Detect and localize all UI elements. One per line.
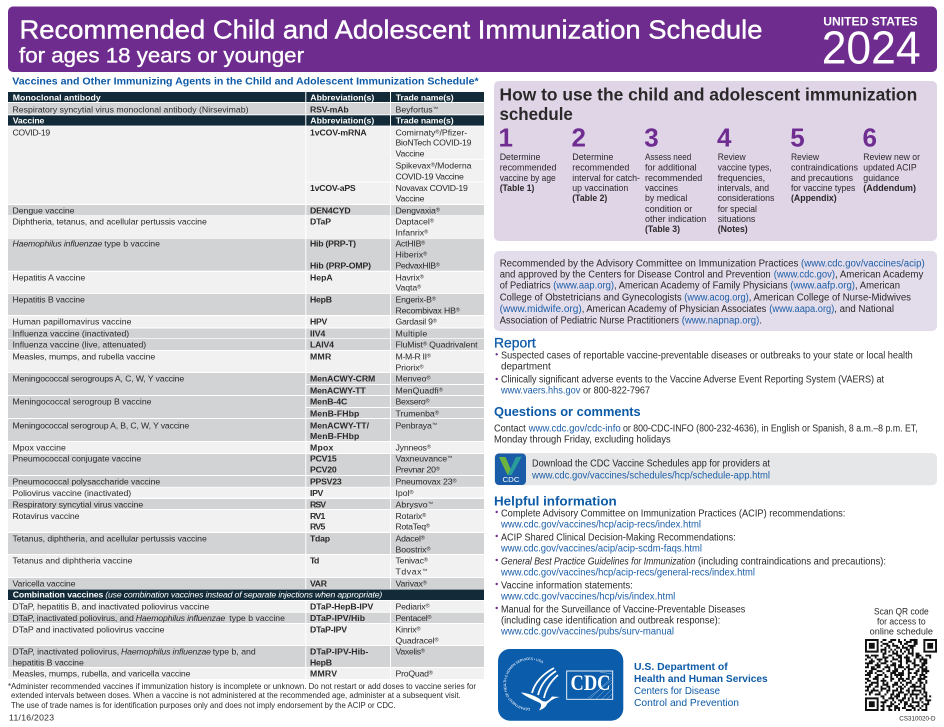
panel: recommending organizations: (www.aapa.org) [769,304,834,315]
row: varicella: Varivax® [396,579,427,589]
row: RSV: Respiratory syncytial virus vaccine [12,500,143,510]
step 5: 5 [790,123,805,153]
row: influenza inactivated [12,328,427,338]
row: DTaP-IPV-Hib-HepB: Vaxelis® [396,647,425,657]
row: Hib: Hiberix® [396,249,427,259]
step 3: 3 [644,123,659,153]
row: RSV monoclonal antibody [12,105,438,115]
row: meningococcal ACWY [12,374,443,396]
row: rotavirus: RV1 [310,511,325,521]
row: DTaP: DTaP [310,217,331,227]
section: questions or comments: Contact [494,424,526,435]
row: Hib: Haemophilus influenzae [12,239,102,249]
row: DTaP-IPV-Hib-HepB: hepatitis B vaccine [12,658,84,668]
row: DTaP-IPV-Hib-HepB [12,647,425,668]
row: hepatitis A: Hepatitis A vaccine [12,273,85,283]
step 6: 6 [862,123,877,153]
row: pneumococcal polysaccharide [12,477,456,487]
step 5: for vaccine types [791,183,856,193]
footnote [8,682,476,710]
row: pneumococcal conjugate: PCV15 [310,454,337,464]
row: HPV: Gardasil 9® [396,317,437,327]
row: meningococcal ACWY: MenQuadfi® [396,386,443,396]
step 1: Determine [500,152,540,162]
row: DTaP-IPV-Hib-HepB: HepB [310,658,332,668]
step 4: 4 [717,123,732,153]
row: MMR [12,352,431,372]
icon: CDC vaccine schedules app [495,454,526,485]
table heading: Vaccines and Other Immunizing Agents in the Child and Adolescent Immunization Schedule* [12,77,480,88]
row: DTaP-IPV/Hib: Pentacel® [396,613,432,623]
panel: recommending organizations: (www.midwife.org) [500,304,582,315]
row: DTaP-HepB-IPV: DTaP-HepB-IPV [310,602,374,612]
step 4: situations [718,214,756,224]
step 3: other indication [645,214,706,224]
row: Hib: ActHIB® [396,239,425,249]
section: helpful information: ACIP Shared Clinical Decision-Making Recommendations: [501,533,736,544]
panel: recommending organizations: . [759,316,762,327]
row: MMRV [12,669,433,679]
row: Hib: Hib (PRP-OMP) [310,260,371,270]
row: RSV: Abrysvo™ [396,500,433,510]
step 4: considerations [718,193,775,203]
step 5: Review [791,152,819,162]
row: MMR: MMR [310,352,332,362]
row: MMR: M-M-R II® [396,352,431,362]
step 4: frequencies, [718,173,765,183]
QR caption: online schedule [870,627,933,637]
step 5: and precautions [791,173,853,183]
row: DTaP-IPV: DTaP-IPV [310,625,347,635]
title: Recommended Child and Adolescent Immunization Schedule [20,15,762,45]
step 3: (Table 3) [645,224,680,234]
QR code [865,640,937,710]
how-to heading [500,85,917,124]
row: meningococcal B: Bexsero® [396,397,430,407]
section: helpful information: www.cdc.gov/vaccines/hcp/acip-recs/index.html [500,520,701,531]
row: meningococcal ABCWY: Meningococcal serogroup A, B, C, W, Y vaccine [12,421,189,431]
panel: how to use [494,81,937,241]
row: pneumococcal conjugate [12,454,452,475]
row: COVID-19: COVID-19 [12,128,50,138]
vaccine table [8,92,484,679]
step 5 [790,123,858,203]
row: dengue [12,206,440,216]
questions heading: Questions or comments [494,404,641,419]
row: pneumococcal polysaccharide: PPSV23 [310,477,342,487]
row: COVID-19: BioNTech COVID-19 [396,138,472,148]
step 4: (Notes) [718,224,748,234]
section: report: www.vaers.hhs.gov [500,386,580,397]
panel: recommending organizations: (www.aafp.org) [790,281,855,292]
header: vaccine [13,116,454,126]
header: combination vaccines: (use combination vaccines instead of separate injections when appropriate) [105,590,382,600]
row: RSV: RSV [310,500,326,510]
row: influenza live: FluMist® Quadrivalent [396,340,478,350]
row: Hib: PedvaxHIB® [396,260,440,270]
row: Hib [12,239,440,270]
row: meningococcal ACWY: MenACWY-TT [310,386,366,396]
panel: recommending organizations: , American College of Nurse-Midwives [749,293,911,304]
row: DTaP-IPV-Hib-HepB: type b, and [213,647,256,657]
QR caption [870,607,933,637]
year: 2024 [822,21,921,73]
panel: recommending organizations: (www.cdc.gov/vaccines/acip) [801,259,925,270]
HHS and CDC name: U.S. Department of [634,662,728,673]
row: influenza inactivated: Influenza vaccine (inactivated) [12,328,129,338]
row: Tdap: Tetanus, diphtheria, and acellular pertussis vaccine [12,534,207,544]
row: Tdap: Adacel® [396,534,425,544]
report heading: Report [494,335,536,350]
section: questions or comments: Monday through Friday, excluding holidays [494,435,671,446]
panel: recommending organizations: , American Academy [835,270,923,281]
HHS and CDC name [634,662,768,709]
row: influenza live [12,340,478,350]
HHS and CDC name: Control and Prevention [634,698,739,709]
row: COVID-19: Vaccine [396,149,425,159]
country label: UNITED STATES [823,14,918,28]
row: dengue: DEN4CYD [310,206,351,216]
section: helpful information [494,494,886,638]
row: RSV monoclonal antibody: RSV-mAb [310,105,349,115]
section: helpful information: www.cdc.gov/vaccines/pubs/surv-manual [500,627,674,638]
panel: recommending organizations: , American Academy of Physician Associates [582,304,766,315]
row: meningococcal ABCWY: Penbraya™ [396,421,437,431]
row: meningococcal ABCWY: MenB-FHbp [310,431,359,441]
step 1: recommended [500,163,556,173]
section: helpful information: www.cdc.gov/vaccines/hcp/vis/index.html [500,592,675,603]
panel: app download: Download the CDC Vaccine Schedules app for providers at [532,459,770,470]
row: DTaP-IPV/Hib: DTaP-IPV/Hib [310,613,365,623]
row: DTaP: Daptacel® [396,217,434,227]
step 2: interval for catch- [572,173,640,183]
row: poliovirus [12,488,414,498]
how-to heading: schedule [500,104,573,124]
row: HPV: Human papillomavirus vaccine [12,317,132,327]
HHS seal: DEPARTMENT OF HEALTH & HUMAN SERVICES • USA [504,658,543,710]
step 2: 2 [572,123,586,153]
row: poliovirus: Poliovirus vaccine (inactivated) [12,488,131,498]
panel: recommending organizations: , American Academy of Family Physicians [614,281,788,292]
row: influenza inactivated: IIV4 [310,328,325,338]
HHS and CDC name: Health and Human Services [634,674,768,685]
step 6: Review new or [863,152,920,162]
row: Tdap: Boostrix® [396,545,430,555]
step 2: recommended [572,163,629,173]
row backgrounds [8,92,484,679]
row: MMRV: ProQuad® [396,669,433,679]
section: report: or 800-822-7967 [583,386,650,397]
step 3: for additional [645,163,697,173]
section: helpful information: (including contraindications and precautions): [698,557,886,568]
row: DTaP-IPV: Kinrix® [396,625,420,635]
QR caption: Scan QR code [874,607,929,617]
row: meningococcal B [12,397,439,419]
row: DTaP-IPV/Hib: Haemophilus influenzae [136,613,226,623]
footnote: The use of trade names is for identification purposes only and does not imply endorsement by the ACIP or CDC. [11,701,396,710]
header: vaccine: Vaccine [13,116,45,126]
panel: app download: www.cdc.gov/vaccines/schedules/hcp/schedule-app.html [531,471,770,482]
step 6: updated ACIP [863,163,917,173]
step 4: intervals, and [718,183,769,193]
row: hepatitis B: Engerix-B® [396,295,436,305]
row: COVID-19: 1vCOV-aPS [310,183,356,193]
header: combination vaccines: Combination vaccines [13,590,104,600]
row: rotavirus: Rotarix® [396,511,426,521]
panel: recommending organizations: of Pediatrics [500,281,551,292]
row: Tdap [12,534,430,555]
subtitle: for ages 18 years or younger [19,45,304,68]
row: pneumococcal conjugate: PCV20 [310,465,337,475]
row: MMR: Priorix® [396,362,424,372]
CDC badge: CDC [570,670,610,695]
row: Td: Tetanus and diphtheria vaccine [12,556,133,566]
step 6 [862,123,920,193]
row: DTaP-IPV-Hib-HepB: DTaP-IPV-Hib- [310,647,368,657]
row: mpox [12,443,431,453]
row: Td [12,556,428,577]
step 1: (Table 1) [500,183,534,193]
row: influenza inactivated: Multiple [396,328,427,338]
header: vaccine: Abbreviation(s) [310,116,374,126]
row: dengue: Dengvaxia® [396,206,440,216]
row: DTaP-IPV-Hib-HepB: Haemophilus influenzae [121,647,211,657]
header: monoclonal antibody: Trade name(s) [396,92,454,102]
row: meningococcal ACWY: MenACWY-CRM [310,374,375,384]
row: rotavirus [12,511,430,532]
footnote: *Administer recommended vaccines if immunization history is incomplete or unknown. Do not restart or add doses to vaccine series for [8,682,476,691]
row: Td: Tdvax™ [396,567,428,577]
row: meningococcal ACWY: Menveo® [396,374,430,384]
row: mpox: Mpox [310,443,333,453]
panel: recommending organizations: (www.aap.org) [553,281,614,292]
row: poliovirus: Ipol® [396,488,414,498]
header: vaccine: Trade name(s) [396,116,454,126]
section: questions or comments: www.cdc.gov/cdc-info [528,424,621,435]
step 2: (Table 2) [572,193,607,203]
row: Td: Td [310,556,319,566]
section: report: department [501,362,551,373]
step 5: contraindications [791,163,858,173]
row: COVID-19 [12,128,472,204]
row: hepatitis B [12,295,460,315]
panel: recommending organizations [494,251,937,331]
step 2: up vaccination [572,183,628,193]
row: varicella: VAR [310,579,328,589]
step 1 [498,123,556,193]
step 5: (Appendix) [791,193,837,203]
step 3: vaccines [645,183,678,193]
step 2 [572,123,640,203]
row: pneumococcal polysaccharide: Pneumovax 23® [396,477,456,487]
row: hepatitis A: HepA [310,273,333,283]
row: MMRV: Measles, mumps, rubella, and varicella vaccine [12,669,191,679]
row: DTaP-HepB-IPV: Pediarix® [396,602,430,612]
panel: recommending organizations: (www.napnap.org) [682,316,759,327]
row: DTaP-IPV/Hib: DTaP, inactivated poliovirus, and [12,613,134,623]
step 3: Assess need [645,152,691,162]
row: DTaP-HepB-IPV: DTaP, hepatitis B, and inactivated poliovirus vaccine [12,602,209,612]
step 6: (Addendum) [863,183,916,193]
row: DTaP-IPV: DTaP and inactivated poliovirus vaccine [12,625,165,635]
panel: recommending organizations: and approved by the Centers for Disease Control and Prevention [500,270,771,281]
how-to heading: How to use the child and adolescent immunization [500,85,917,105]
section: helpful information: Manual for the Surveillance of Vaccine-Preventable Diseases [501,605,745,616]
row: mpox: Jynneos® [396,443,431,453]
section: helpful information: www.cdc.gov/vaccines/acip/acip-scdm-faqs.html [500,544,702,555]
row: DTaP [12,217,434,237]
section: helpful information: General Best Practice Guidelines for Immunization [501,557,696,568]
row: meningococcal B: Meningococcal serogroup B vaccine [12,397,152,407]
row: hepatitis A: Havrix® [396,273,424,283]
row: pneumococcal conjugate: Pneumococcal conjugate vaccine [12,454,141,464]
row: DTaP-IPV: Quadracel® [396,636,438,646]
panel: app download [494,453,937,485]
row: DTaP-IPV/Hib [12,613,432,623]
row: varicella [12,579,427,589]
row: pneumococcal conjugate: Vaxneuvance™ [396,454,452,464]
step 1: vaccine by age [500,173,556,183]
row: RSV monoclonal antibody: Beyfortus™ [396,105,438,115]
section: report: Clinically significant adverse events to the Vaccine Adverse Event Reporting System (VAERS) at [501,375,884,386]
helpful heading: Helpful information [494,494,617,509]
row: RSV [12,500,433,510]
row: MMRV: MMRV [310,669,337,679]
row: HPV: HPV [310,317,328,327]
step 3: condition or [645,204,692,214]
row: DTaP-HepB-IPV [12,602,430,612]
icon: CDC vaccine schedules app: CDC [502,477,520,484]
row: influenza live: Influenza vaccine (live, attenuated) [12,340,146,350]
row: HPV [12,317,437,327]
row: DTaP: Infanrix® [396,227,428,237]
section: questions or comments [494,404,918,446]
row: meningococcal ABCWY [12,421,437,441]
panel: recommending organizations: , and National [834,304,894,315]
section: helpful information: www.cdc.gov/vaccines/hcp/acip-recs/general-recs/index.html [500,568,755,579]
section: helpful information: (including case identification and outbreak response): [501,616,720,627]
step 4: Review [718,152,746,162]
row: varicella: Varicella vaccine [12,579,76,589]
panel: recommending organizations: Association of Pediatric Nurse Practitioners [500,316,679,327]
header: monoclonal antibody: Abbreviation(s) [310,92,374,102]
section: report: Suspected cases of reportable vaccine-preventable diseases or outbreaks to your state or local health [501,351,913,362]
row: DTaP-IPV/Hib: type b vaccine [229,613,285,623]
row: Td: Tenivac® [396,556,428,566]
header: monoclonal antibody: Monoclonal antibody [13,92,101,102]
panel: recommending organizations: (www.acog.org) [684,293,749,304]
step 2: Determine [572,152,613,162]
row: meningococcal ACWY: Meningococcal serogroups A, C, W, Y vaccine [12,374,184,384]
panel: recommending organizations: Recommended by the Advisory Committee on Immunization Practices [500,259,798,270]
header: monoclonal antibody [13,92,454,102]
row: influenza live: LAIV4 [310,340,334,350]
step 6: guidance [863,173,899,183]
row: MMR: Measles, mumps, and rubella vaccine [12,352,155,362]
footnote: extended intervals between doses. When a vaccine is not administered at the recommended age, administer at a subsequent visit. [11,691,461,700]
row: COVID-19: COVID-19 Vaccine [396,172,464,182]
logo: HHS and CDC [498,649,624,721]
row: hepatitis B: Recombivax HB® [396,305,460,315]
row: COVID-19: 1vCOV-mRNA [310,128,367,138]
row: DTaP-IPV [12,625,438,646]
row: COVID-19: Comirnaty®/Pfizer- [396,128,467,138]
step 4: vaccine types, [718,163,772,173]
date: 11/16/2023 [9,713,54,723]
row: hepatitis A [12,273,424,293]
row: rotavirus: RV5 [310,522,325,532]
step 4 [717,123,775,234]
row: pneumococcal conjugate: Prevnar 20® [396,465,440,475]
step 3: by medical [645,193,687,203]
panel: recommending organizations: College of Obstetricians and Gynecologists [500,293,682,304]
section: report [494,335,913,397]
step 3: recommended [645,173,702,183]
row: hepatitis A: Vaqta® [396,283,421,293]
panel: recommending organizations: , American [855,281,900,292]
row: COVID-19: Spikevax®/Moderna [396,161,472,171]
section: helpful information: Vaccine information statements: [501,581,633,592]
row: DTaP: Diphtheria, tetanus, and acellular pertussis vaccine [12,217,207,227]
row: meningococcal B: MenB-4C [310,397,348,407]
row: mpox: Mpox vaccine [12,443,66,453]
QR caption: for access to [877,617,926,627]
row: DTaP-IPV-Hib-HepB: DTaP, inactivated poliovirus, [12,647,119,657]
row: rotavirus: RotaTeq® [396,522,430,532]
row: hepatitis B: Hepatitis B vaccine [12,295,85,305]
CS code: CS310020-D [899,716,936,723]
row: hepatitis B: HepB [310,295,332,305]
row: Hib: Hib (PRP-T) [310,239,356,249]
panel: recommending organizations: (www.cdc.gov) [774,270,835,281]
row: meningococcal B: Trumenba® [396,409,439,419]
row: Tdap: Tdap [310,534,330,544]
row: dengue: Dengue vaccine [12,206,75,216]
step 1: 1 [498,123,513,153]
row: rotavirus: Rotavirus vaccine [12,511,80,521]
row: COVID-19: Vaccine [396,194,425,204]
row: RSV monoclonal antibody: Respiratory syncytial virus monoclonal antibody (Nirsevimab) [12,105,249,115]
section: helpful information: Complete Advisory Committee on Immunization Practices (ACIP) recommendations: [501,509,845,520]
row: COVID-19: Novavax COVID-19 [396,183,468,193]
row: poliovirus: IPV [310,488,324,498]
row: meningococcal B: MenB-FHbp [310,409,359,419]
step 3 [644,123,706,234]
HHS and CDC name: Centers for Disease [634,686,720,697]
step 4: for special [718,204,757,214]
row: meningococcal ABCWY: MenACWY-TT/ [310,421,370,431]
row: Hib: type b vaccine [104,239,160,249]
row: pneumococcal polysaccharide: Pneumococcal polysaccharide vaccine [12,477,160,487]
title banner [8,6,937,73]
